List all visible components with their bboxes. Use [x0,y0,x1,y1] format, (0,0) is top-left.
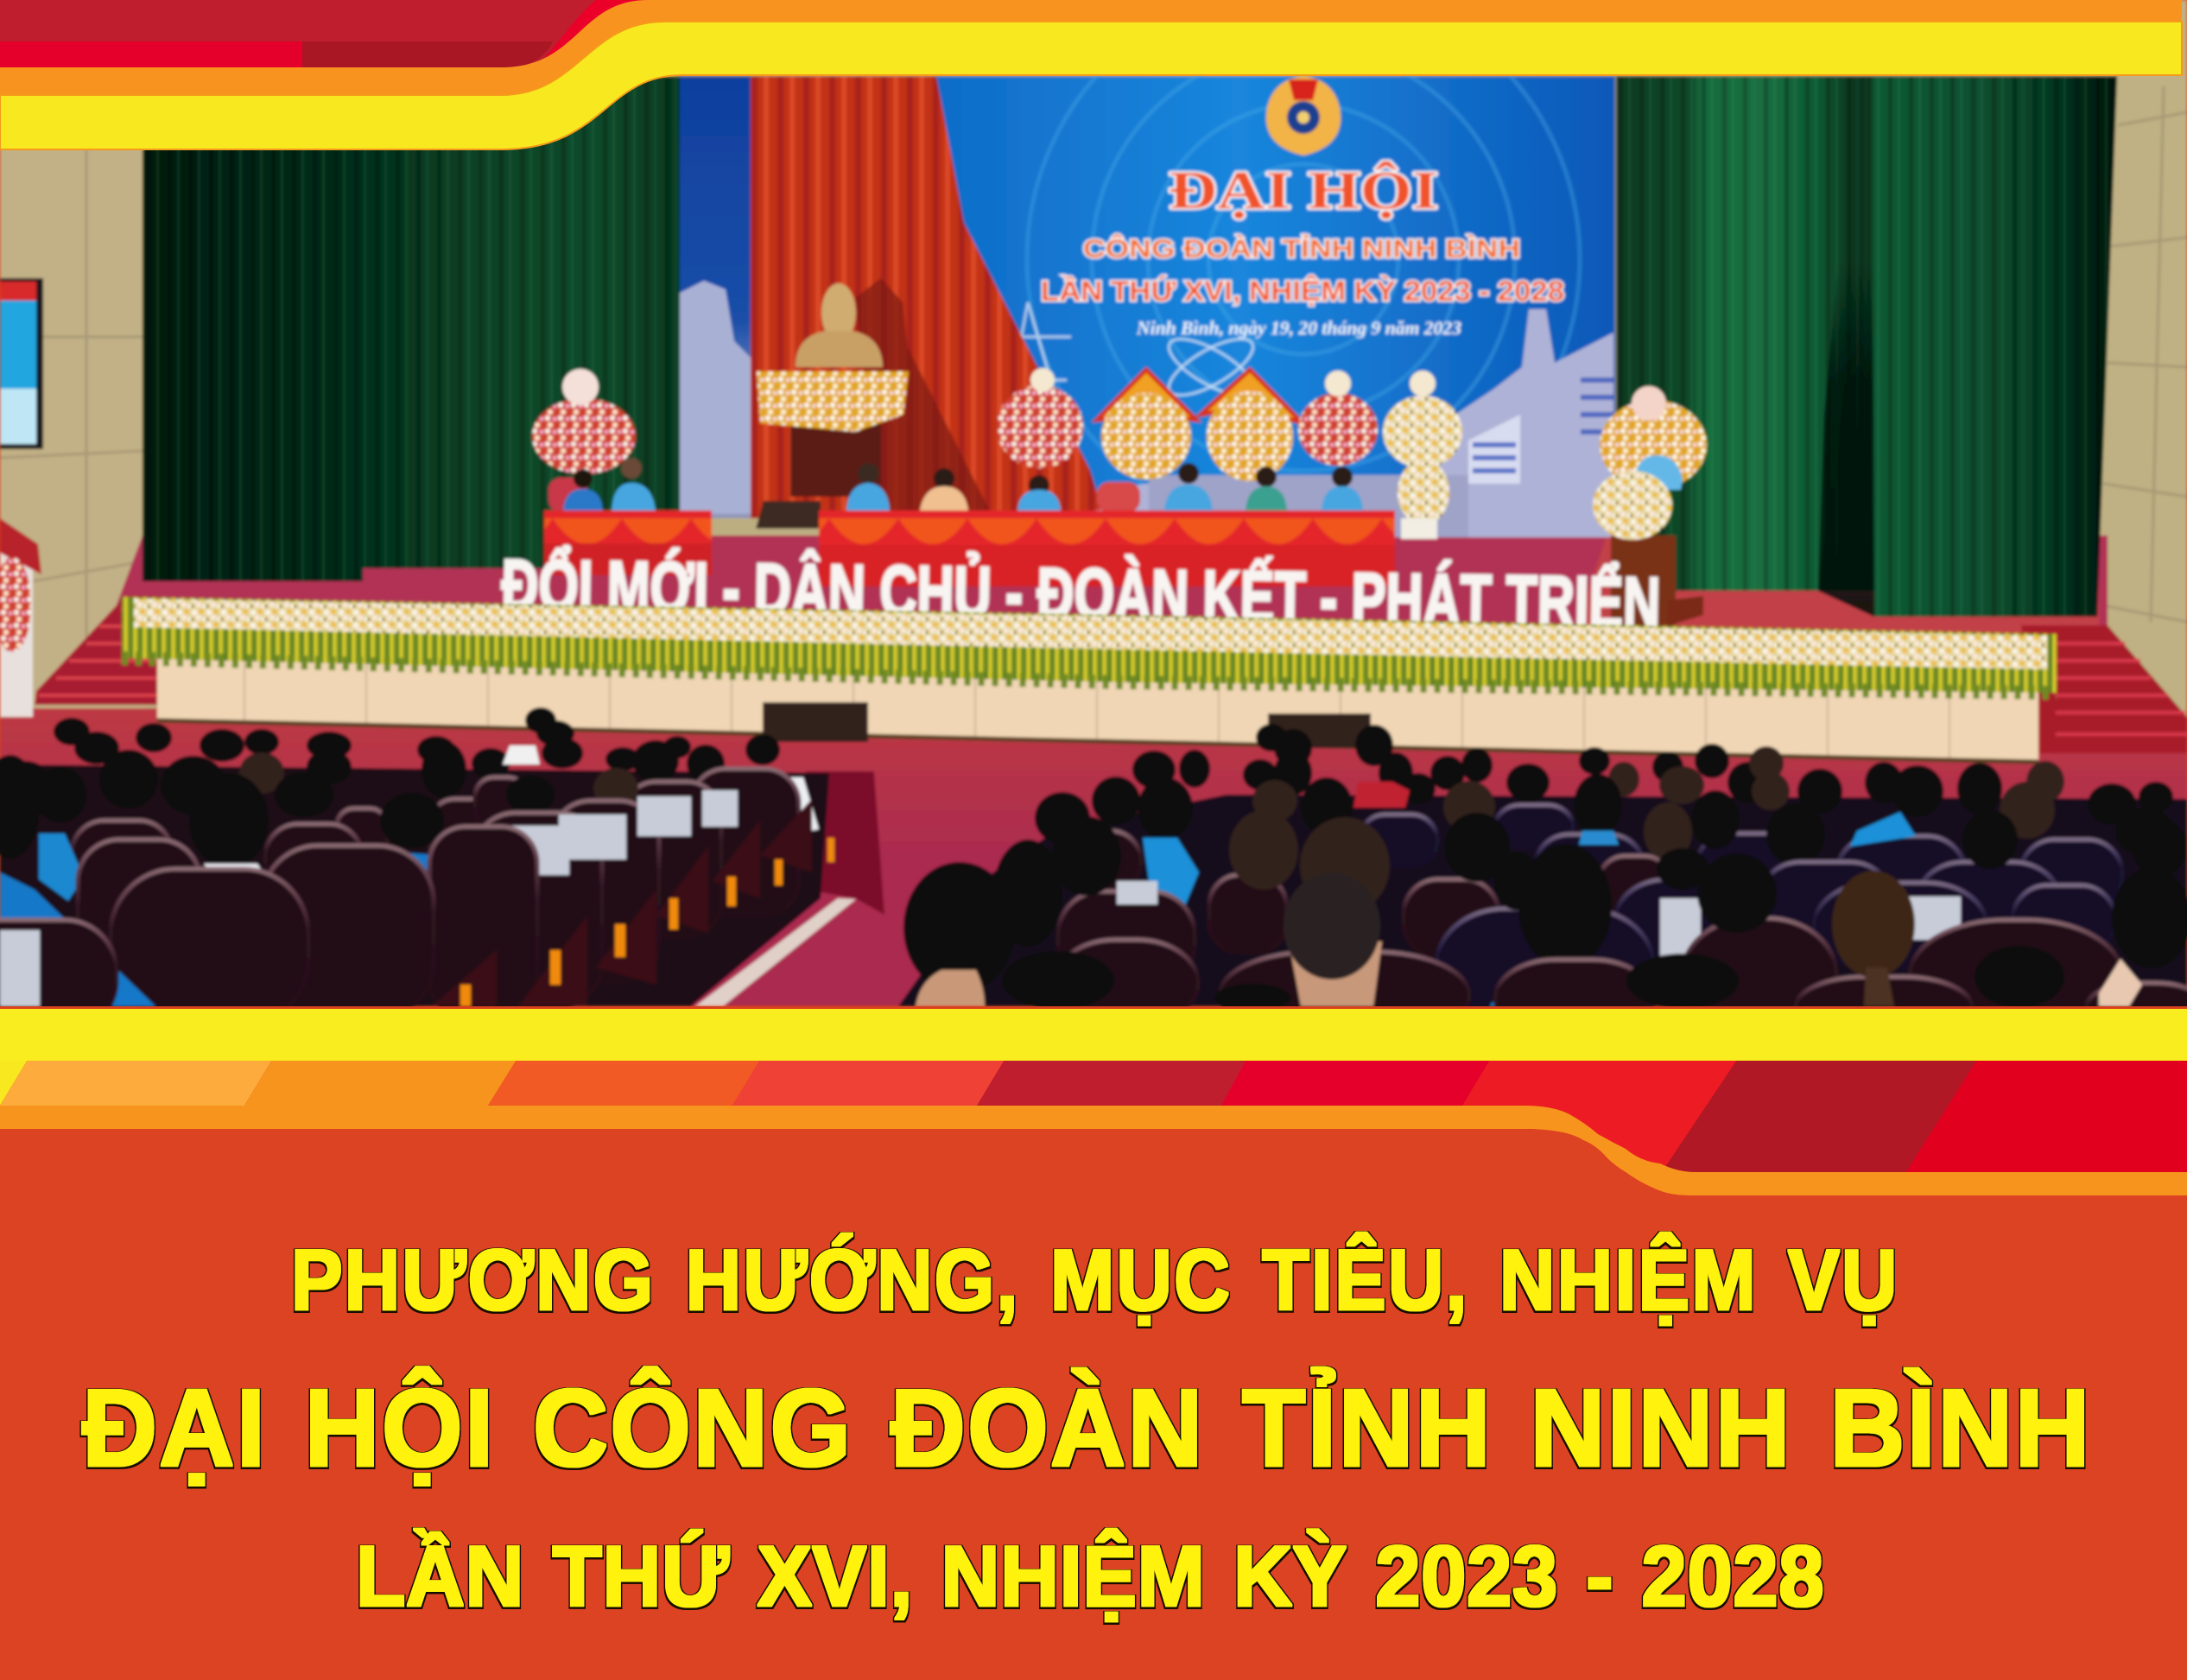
lower band [0,1006,2187,1198]
main red panel [0,1129,2187,1680]
banner text: term: LẦN THỨ XVI, NHIỆM KỲ 2023 - 2028 [1041,276,1564,307]
top red ribbon [0,0,648,67]
banner text: ĐẠI HỘI: ĐẠI HỘI [1169,162,1438,220]
banner text: union name: CÔNG ĐOÀN TỈNH NINH BÌNH [1083,234,1520,263]
far left floral stand [0,518,41,717]
stage floor [116,534,2109,629]
title line 3: LẦN THỨ XVI, NHIỆM KỲ 2023 - 2028 [356,1529,1824,1625]
presidium people [548,458,1363,512]
left wall [1,150,146,637]
left curtain [143,76,680,581]
speaker podium with flowers [1593,386,1707,626]
left stairs [35,596,157,705]
left flower stand [532,369,636,474]
aisle step strip [695,898,856,1006]
red drape [751,76,1102,518]
rear right heads [1132,724,2173,825]
top banner [0,0,2182,149]
right mid people [1035,766,2174,924]
right mid chairs [1055,805,2122,914]
right front chairs [1058,856,2115,1021]
title line 1: PHƯƠNG HƯỚNG, MỤC TIÊU, NHIỆM VỤ [291,1233,1897,1328]
banner text: date: Ninh Bình, ngày 19, 20 tháng 9 năm 2023 [1136,317,1461,339]
back row left heads [54,707,819,834]
nearest chairs [1055,844,2187,1038]
stage flower band [122,597,2057,693]
top yellow ribbon [0,22,2182,149]
slogan: ĐỔI MỚI - DÂN CHỦ - ĐOÀN KẾT - PHÁT TRIỂN [501,544,1661,643]
front table [806,771,884,915]
audience floor [0,708,2187,1006]
left rear chairs [72,769,799,937]
flower stands [997,368,1462,539]
right front people [1052,810,2187,914]
wall screen [0,278,43,449]
main table [819,510,1395,586]
nearest people [903,840,2187,1011]
right curtain [1616,76,2117,617]
left table [544,510,712,575]
left front chairs and people [0,755,738,1032]
left middle heads [3,741,638,901]
top orange ribbon [0,0,2182,97]
armrests with lights [432,799,834,1006]
colour strip [0,1060,2187,1198]
stage base [157,646,2038,762]
podium with flowers [756,371,909,529]
banner emblem [1266,76,1341,155]
orange ribbon [0,1106,2187,1195]
title line 2: ĐẠI HỘI CÔNG ĐOÀN TỈNH NINH BÌNH [82,1366,2090,1490]
backdrop: congress banner [677,76,1618,540]
yellow band [0,1009,2187,1061]
right stairs [2021,625,2187,753]
left audience block [0,707,834,1032]
right wall [2103,86,2187,623]
stage speakers [763,702,1371,748]
right audience block [898,724,2187,1038]
bust statue [796,283,883,367]
photo: congress hall [0,0,2187,1038]
